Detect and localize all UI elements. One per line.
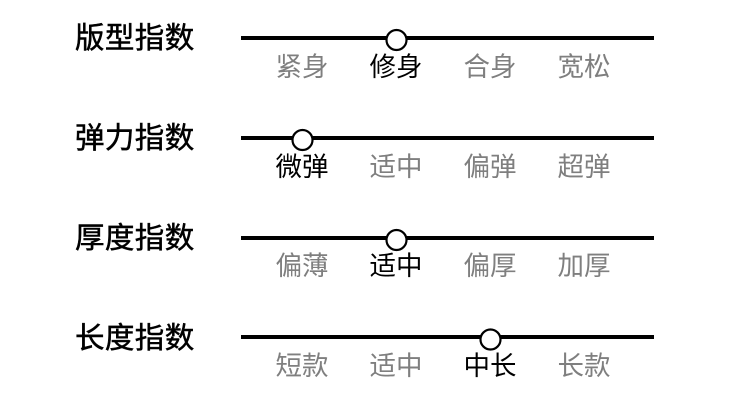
scale labels: length: 适中 bbox=[370, 351, 422, 381]
panel: thickness index bbox=[75, 222, 654, 281]
scale labels: length bbox=[276, 351, 610, 381]
scale labels: length: 中长 bbox=[464, 351, 516, 381]
slider marker: thickness bbox=[386, 230, 406, 250]
scale labels: elasticity: 微弹 bbox=[276, 152, 328, 182]
heading: fit index: 版型指数 bbox=[75, 22, 195, 55]
panel: elasticity index bbox=[75, 122, 654, 182]
scale labels: length: 长款 bbox=[558, 351, 610, 381]
heading: elasticity index: 弹力指数 bbox=[75, 122, 195, 155]
scale labels: length: 短款 bbox=[276, 351, 328, 381]
heading: length index: 长度指数 bbox=[75, 322, 195, 355]
heading: thickness index: 厚度指数 bbox=[75, 222, 195, 255]
scale labels: fit: 宽松 bbox=[558, 52, 610, 82]
slider marker: length bbox=[480, 330, 500, 350]
slider marker: elasticity bbox=[292, 130, 312, 150]
scale labels: elasticity: 偏弹 bbox=[464, 152, 516, 182]
scale labels: thickness: 加厚 bbox=[558, 251, 610, 281]
panel: length index bbox=[75, 322, 654, 381]
scale labels: thickness bbox=[276, 251, 610, 281]
panel: fit index bbox=[75, 22, 654, 82]
scale line: length bbox=[241, 335, 654, 339]
scale labels: elasticity: 适中 bbox=[370, 152, 422, 182]
scale labels: elasticity: 超弹 bbox=[558, 152, 610, 182]
scale line: elasticity bbox=[241, 136, 654, 140]
scale line: thickness bbox=[241, 236, 654, 240]
scale labels: fit bbox=[276, 52, 610, 82]
scale labels: fit: 紧身 bbox=[276, 52, 328, 82]
scale labels: fit: 修身 bbox=[370, 52, 422, 82]
scale labels: elasticity bbox=[276, 152, 610, 182]
slider marker: fit bbox=[386, 30, 406, 50]
scale labels: thickness: 适中 bbox=[370, 251, 422, 281]
scale labels: thickness: 偏厚 bbox=[464, 251, 516, 281]
scale line: fit bbox=[241, 36, 654, 40]
scale labels: thickness: 偏薄 bbox=[276, 251, 328, 281]
scale labels: fit: 合身 bbox=[464, 52, 516, 82]
